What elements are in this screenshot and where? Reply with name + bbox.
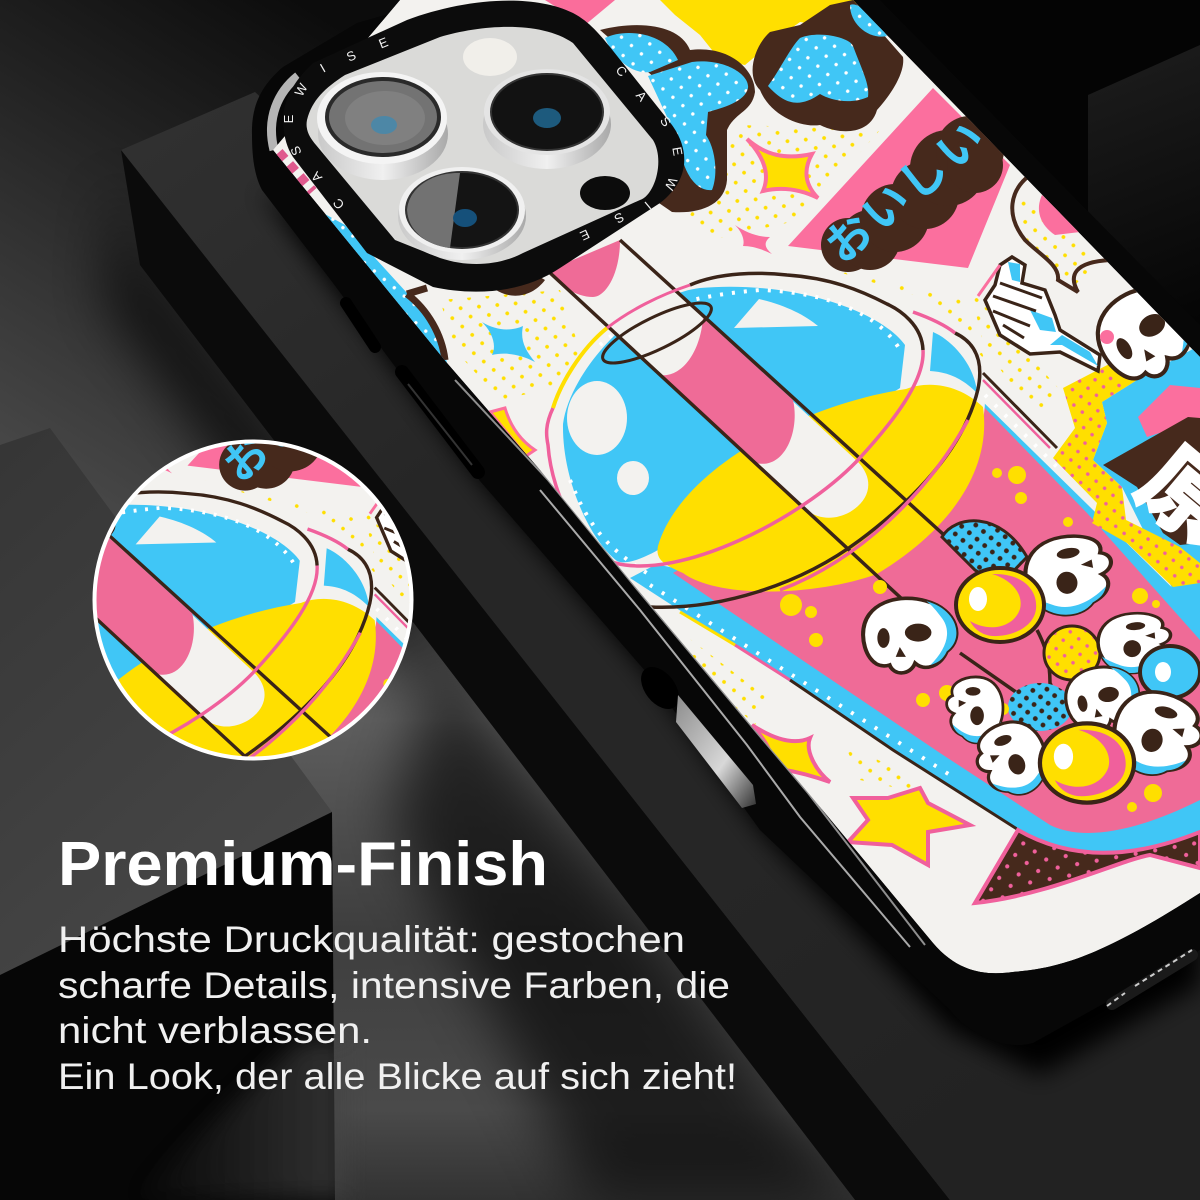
camera ring brand text: S — [657, 114, 675, 130]
rim ring front brown — [690, 273, 923, 350]
straw pink middle — [660, 318, 795, 464]
right clover blue — [768, 35, 868, 103]
gold ball one — [956, 568, 1044, 642]
left clover shadow — [600, 25, 755, 212]
magnifier circle detail — [0, 230, 632, 1164]
pink triangle — [788, 88, 1010, 268]
straw white — [548, 240, 868, 518]
side button metal — [676, 695, 756, 808]
camera ring brand text: I — [642, 199, 654, 212]
left clover blue — [605, 33, 748, 190]
left edge blue halftone — [323, 213, 447, 363]
speech bubble — [1012, 175, 1110, 292]
blue ball — [1140, 646, 1200, 698]
camera ring brand text — [281, 34, 686, 244]
lower-left sparkle — [490, 408, 535, 456]
gold ball two — [1040, 723, 1134, 803]
sparkle yellow — [747, 139, 818, 198]
rim ring front pink — [547, 350, 923, 566]
background: soft shadow beside block — [110, 180, 478, 730]
skull pink cheek — [1100, 330, 1114, 344]
artwork on case back — [273, 0, 1200, 973]
case rim behind ring — [271, 76, 298, 150]
straw tip — [960, 630, 1051, 698]
zigzag yellow burst — [1053, 360, 1200, 587]
rim ring back pink top — [913, 312, 955, 333]
heading: Premium-Finish — [58, 830, 548, 899]
background: upper right block — [1088, 45, 1200, 360]
dome back white — [548, 275, 985, 590]
dome back blue patch — [930, 332, 977, 393]
drink yellow dots — [780, 466, 1162, 812]
pink drink — [673, 403, 1200, 833]
halftone circle yellow — [1044, 626, 1100, 680]
camera ring brand text: C — [613, 63, 630, 80]
camera ring brand text: W — [292, 80, 311, 99]
art base — [273, 0, 1200, 973]
camera ring brand text: W — [661, 175, 680, 193]
skull four — [1061, 661, 1144, 735]
body text: Ein Look, der alle Blicke auf sich zieht! — [58, 1056, 737, 1097]
microphone hole — [580, 176, 630, 210]
camera ring brand text: E — [578, 226, 592, 244]
case gloss strip outer — [540, 490, 910, 947]
body text — [58, 919, 737, 1097]
background: left stepped block front — [0, 812, 335, 1200]
volume button sheen — [408, 384, 472, 465]
blue band dots — [650, 395, 1060, 775]
zigzag pink — [1138, 385, 1200, 437]
skull one — [863, 598, 956, 673]
straw lines — [548, 240, 944, 599]
lens C: telephoto — [398, 167, 526, 260]
lens A: wide — [317, 72, 448, 180]
dome highlight — [734, 299, 818, 328]
skull five — [1105, 683, 1200, 785]
skull two — [1020, 529, 1119, 621]
cup edge line lower — [790, 680, 1017, 829]
camera plate — [307, 27, 658, 264]
brown bits beneath camera — [496, 278, 545, 296]
rim ring front pink top — [607, 285, 690, 328]
cup lower pink line — [735, 645, 790, 680]
bottom-left sparkle — [752, 725, 830, 782]
camera ring brand text: I — [317, 61, 328, 76]
dome dot arcs — [600, 290, 900, 350]
cup lower yellow line — [680, 612, 735, 645]
straw pink top — [547, 240, 620, 297]
dome spot small — [617, 461, 649, 495]
cup edge pink line — [983, 380, 1050, 448]
top right blue fragment — [850, 4, 887, 37]
zigzag blue — [1093, 345, 1200, 623]
background: upper right black area — [853, 0, 1200, 400]
dome dot arc lower — [570, 480, 650, 575]
body text: scharfe Details, intensive Farben, die — [58, 965, 730, 1006]
right clover shadow — [753, 0, 903, 131]
charging port — [1112, 955, 1192, 1004]
body text: nicht verblassen. — [58, 1010, 372, 1051]
camera ring brand text: E — [669, 146, 686, 157]
dome blue — [563, 287, 905, 562]
background: main block front face — [121, 150, 950, 1200]
small side opening — [346, 303, 375, 347]
case gloss strip inner — [455, 380, 925, 945]
camera ring brand text: S — [344, 47, 358, 65]
yellow star — [848, 788, 970, 865]
camera ring brand text: E — [376, 34, 390, 51]
skull top right — [1096, 289, 1190, 380]
top yellow character — [660, 0, 858, 65]
case silhouette — [252, 0, 1200, 1045]
rim ring back brown — [650, 333, 980, 607]
background: lit floor shading — [390, 660, 855, 1200]
background: light spill at the bottom — [130, 1040, 345, 1200]
camera ring brand text: C — [330, 195, 347, 212]
camera ring outer — [283, 1, 684, 292]
background: phone cast shadow — [260, 190, 1200, 1075]
side button socket — [633, 660, 687, 716]
left edge pink fragments — [278, 153, 312, 192]
yellow halftone patches — [440, 125, 1100, 795]
blue cup band — [630, 397, 1200, 853]
dome yellow liquid — [657, 385, 984, 592]
skull seven — [968, 713, 1056, 805]
skull three — [1096, 610, 1174, 676]
rim ring back pink lower — [780, 420, 968, 590]
thumbs-up arm — [978, 257, 1100, 371]
camera ring brand text: A — [308, 168, 325, 185]
camera ring brand text: A — [633, 88, 650, 105]
bottom dark star — [975, 830, 1200, 903]
brown word cloud — [821, 116, 1004, 272]
pink flag top — [545, 0, 615, 25]
Japanese word: おいしい — [816, 111, 994, 273]
camera ring brand text: E — [281, 114, 296, 123]
halftone circle blue low — [1008, 683, 1072, 731]
camera ring brand text: S — [287, 144, 305, 158]
sparkle pink — [735, 225, 772, 254]
camera ring brand text: S — [611, 209, 627, 227]
cup edge line upper — [983, 373, 1057, 448]
volume button — [402, 372, 478, 472]
flash — [463, 38, 517, 76]
body text: Höchste Druckqualität: gestochen — [58, 919, 685, 960]
halftone circle blue — [942, 521, 1027, 585]
star blue — [482, 322, 535, 362]
dome spot large — [567, 381, 627, 455]
speech bubble pink — [1039, 195, 1080, 235]
background: lit lower floor — [50, 265, 855, 1200]
kanji backing — [1103, 417, 1200, 545]
straw ellipse — [596, 292, 718, 374]
left edge brown line — [407, 288, 445, 360]
phone case body — [252, 0, 1200, 1045]
charging port rim — [1107, 950, 1192, 1006]
lens B: main — [483, 69, 611, 169]
skull six — [947, 677, 1003, 743]
rim ring front yellow — [553, 328, 607, 408]
background: left stepped block top — [0, 428, 332, 975]
